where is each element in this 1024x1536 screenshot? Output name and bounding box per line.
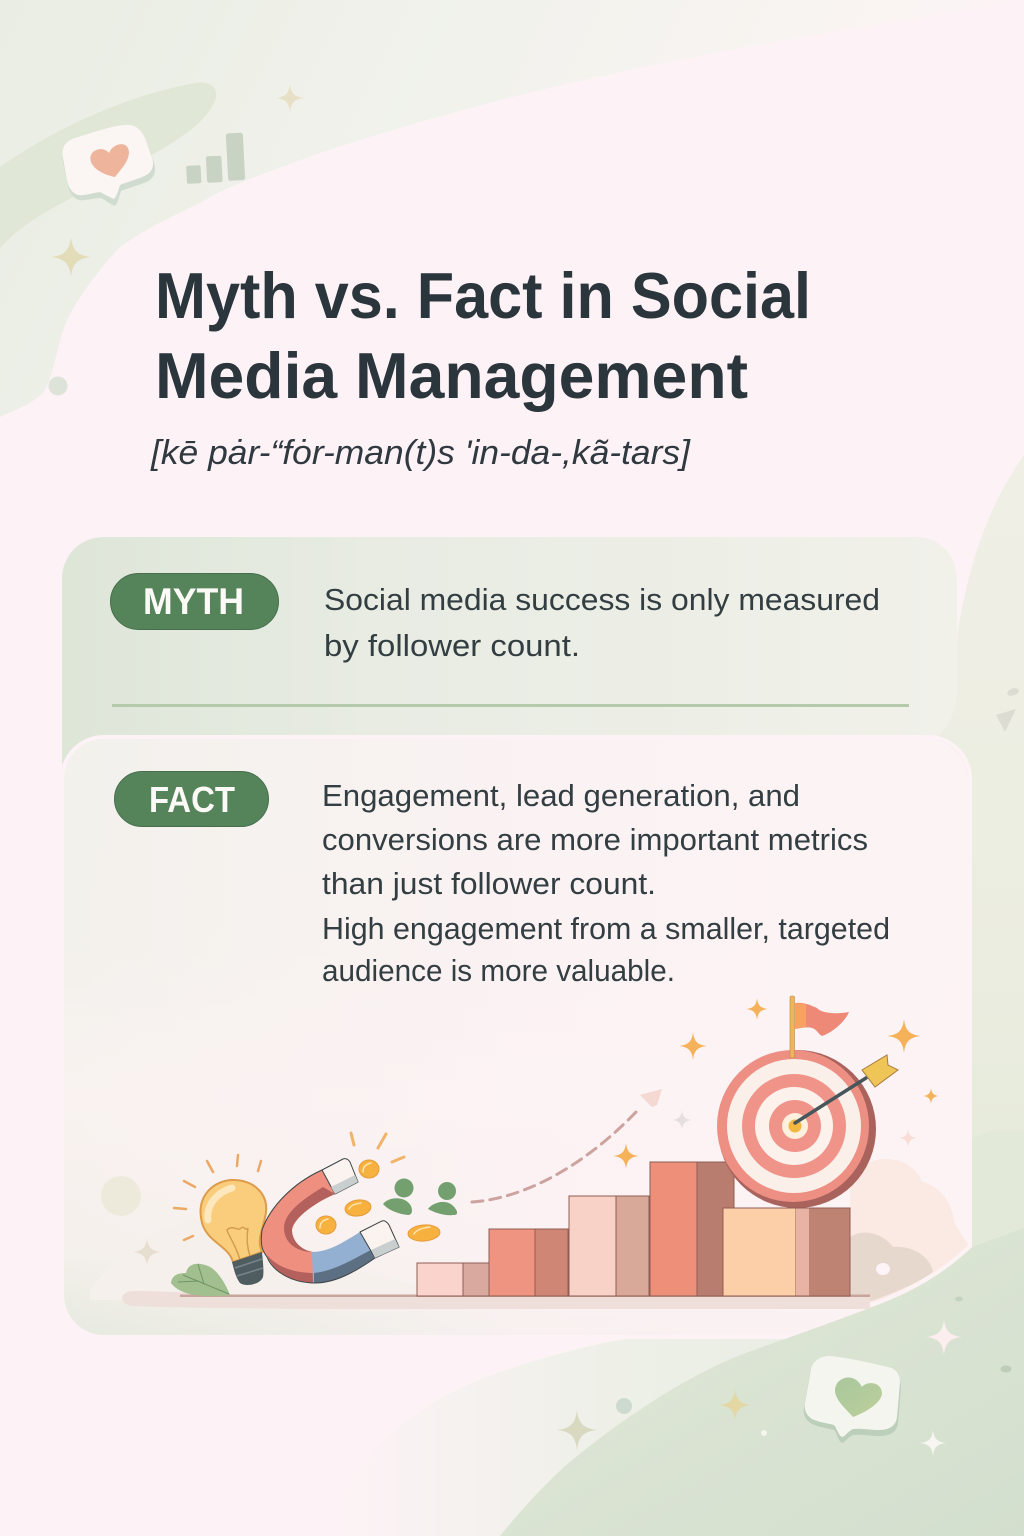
panel: fact — [62, 737, 970, 1337]
background: panel corner edge — [850, 1243, 969, 1308]
magnet red half — [261, 1170, 335, 1283]
illustration: orange sparkles — [613, 998, 939, 1169]
fact badge — [114, 772, 268, 826]
fact statement: High engagement from a smaller, targeted — [322, 912, 890, 946]
icon: small bar chart — [186, 133, 245, 184]
icon: heart — [90, 144, 129, 177]
bar 4 — [650, 1162, 734, 1296]
background: bottom-right green hill — [500, 1228, 1024, 1536]
bar 1 — [417, 1263, 489, 1296]
fact statement: audience is more valuable. — [322, 954, 675, 988]
myth badge — [110, 574, 278, 630]
fact badge: FACT — [149, 779, 235, 820]
illustration: clouds — [850, 1159, 968, 1308]
fact statement: Engagement, lead generation, and — [322, 779, 800, 813]
icon: arrow in target — [795, 1055, 898, 1123]
magnet outline — [261, 1170, 375, 1283]
background: dark green swoosh — [0, 82, 216, 248]
bottom sparkles — [557, 1319, 962, 1456]
background: top-left green wash — [0, 0, 1024, 417]
icon: heart speech bubble — [62, 125, 155, 206]
icon: target — [717, 1050, 876, 1208]
background: right green tint — [972, 1130, 1024, 1260]
myth divider — [112, 704, 909, 707]
icon: magnet — [261, 1159, 399, 1283]
illustration: bars — [417, 1162, 734, 1296]
background: right green blob — [925, 455, 1024, 1300]
magnet lower shade — [267, 1255, 315, 1283]
myth statement: Social media success is only measured — [324, 582, 880, 617]
magnet inner shade — [284, 1187, 335, 1252]
myth statement: by follower count. — [324, 628, 580, 663]
icon: leaf — [171, 1264, 230, 1296]
title: Media Management — [155, 339, 748, 412]
illustration: coins — [316, 1160, 441, 1242]
right blob marks — [996, 687, 1020, 732]
background: bottom pale green layer — [330, 1280, 1024, 1536]
sparkle top — [276, 84, 304, 112]
fact statement — [322, 779, 890, 988]
sparkle left — [51, 237, 91, 277]
bar 2 — [489, 1229, 568, 1296]
icon: heart — [835, 1377, 882, 1417]
pronunciation subtitle: [kē pȧr-“fȯr-man(t)s 'in-da-,kã-tars] — [150, 434, 692, 472]
illustration: ground — [122, 1291, 870, 1309]
illustration: bulb rays — [174, 1155, 261, 1240]
illustration: left glow and hills — [90, 1176, 420, 1300]
illustration: dashed growth arrow — [472, 1089, 662, 1202]
magnet blue half — [312, 1232, 375, 1283]
fact statement: than just follower count. — [322, 867, 656, 901]
icon: green heart speech bubble — [804, 1356, 901, 1443]
magnet bottom cap — [360, 1221, 399, 1258]
illustration: pale sparkles — [672, 1110, 917, 1147]
magnet top cap — [322, 1159, 358, 1194]
dot left — [48, 376, 68, 396]
bottom dots — [616, 1296, 1012, 1436]
title — [155, 259, 811, 412]
magnet blue shade — [314, 1250, 375, 1283]
bar 5 — [723, 1208, 850, 1296]
title: Myth vs. Fact in Social — [155, 259, 811, 332]
icon: flag — [790, 996, 849, 1058]
icon: light bulb — [201, 1180, 266, 1285]
illustration: magnet rays — [351, 1133, 404, 1162]
bar 3 — [569, 1196, 649, 1296]
panel: myth — [62, 537, 957, 800]
myth statement — [324, 582, 880, 663]
myth badge: MYTH — [143, 581, 244, 622]
fact statement: conversions are more important metrics — [322, 823, 868, 857]
illustration: people icons — [383, 1178, 457, 1215]
